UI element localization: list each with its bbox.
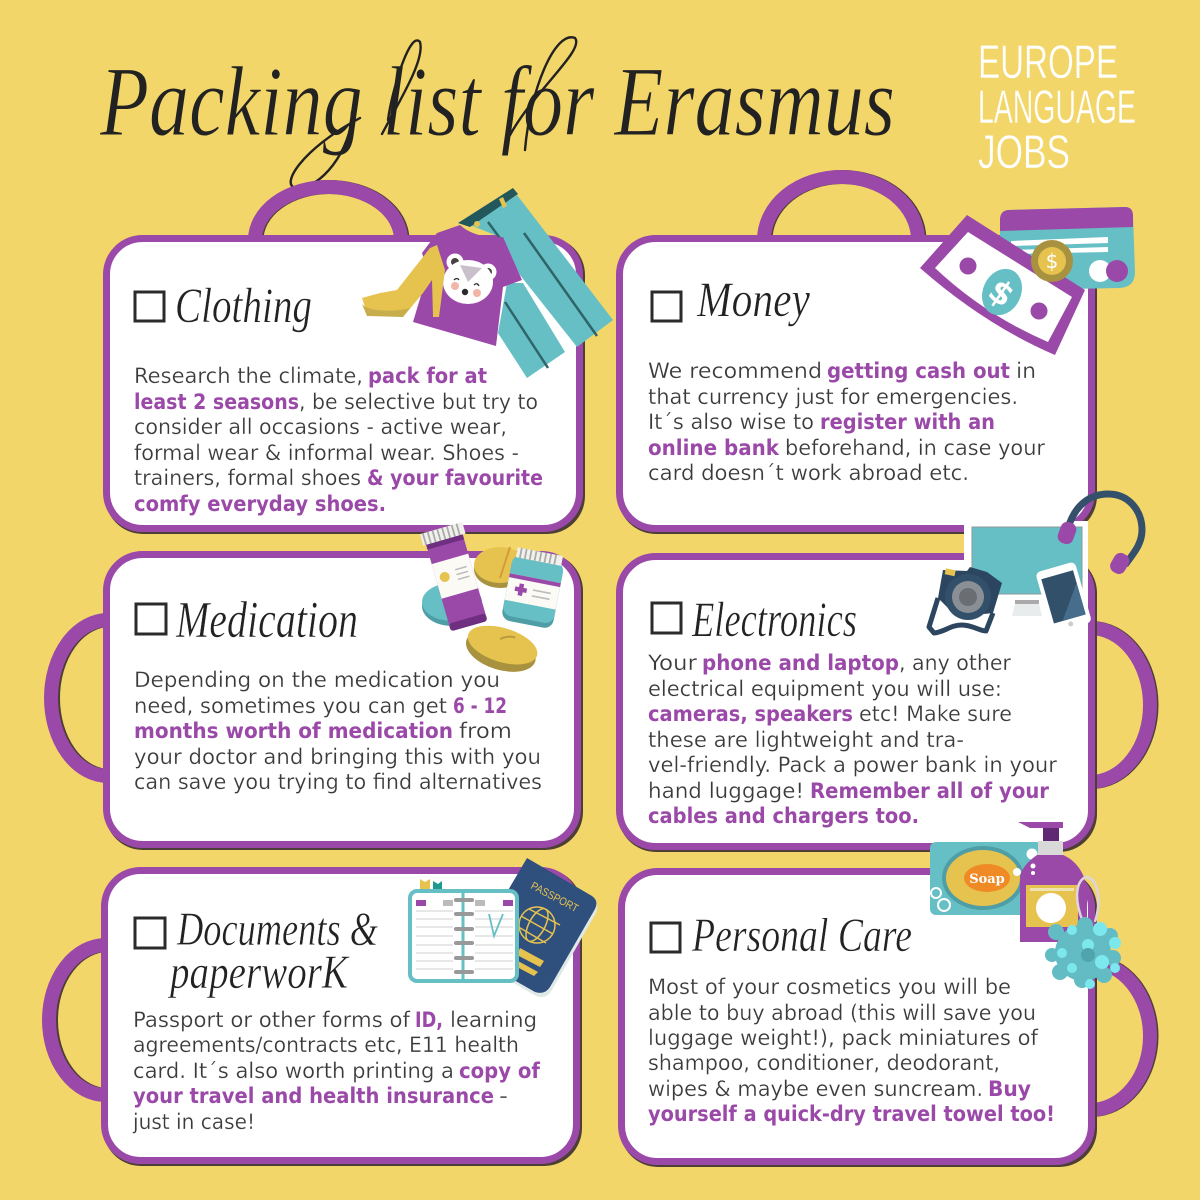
text block: copy of: [459, 1059, 541, 1083]
text block: register with an: [820, 410, 995, 434]
text block: agreements/contracts etc, E11 health: [133, 1033, 519, 1058]
text block: Depending on the medication you: [134, 668, 500, 693]
icon: soap, bottle and sponge: [930, 822, 1121, 989]
text block: luggage weight!), pack miniatures of: [648, 1026, 1038, 1051]
t-shirt: [413, 225, 522, 346]
card: [104, 870, 576, 1160]
text block: getting cash out: [827, 359, 1010, 383]
teal bottle: [501, 547, 566, 629]
text block: these are lightweight and tra-: [648, 728, 964, 753]
panel: documents: [49, 858, 597, 1166]
soap dish: Soap: [969, 872, 1005, 887]
purple bottle: [420, 522, 490, 632]
bag handle: [1090, 628, 1150, 782]
coin: [1031, 240, 1073, 282]
text block: cables and chargers too.: [648, 804, 919, 828]
monitor: [972, 527, 1082, 616]
pump bottle: [1018, 822, 1087, 942]
text block: shampoo, conditioner, deodorant,: [648, 1051, 1000, 1076]
text block: [134, 668, 542, 795]
heading: [168, 903, 378, 999]
text block: vel-friendly. Pack a power bank in your: [648, 753, 1057, 778]
bag handle: [49, 945, 106, 1095]
passport: PASSPORT: [529, 880, 580, 915]
text block: , any other: [899, 651, 1011, 676]
text block: Buy: [988, 1077, 1031, 1101]
text block: Research the climate,: [134, 364, 363, 389]
text block: learning: [450, 1008, 537, 1033]
text block: least 2 seasons: [134, 390, 299, 414]
large pill: [461, 618, 542, 680]
text block: Passport or other forms of: [133, 1008, 410, 1033]
icon: passport and notebook: [410, 858, 597, 997]
coin: $: [1046, 249, 1058, 273]
text block: online bank: [648, 436, 780, 460]
checkbox: [135, 918, 165, 948]
text block: card. It´s also worth printing a: [133, 1059, 454, 1084]
title: [99, 37, 895, 188]
bag handle: [764, 177, 918, 240]
text block: electrical equipment you will use:: [648, 677, 1002, 702]
text block: cameras, speakers: [648, 702, 853, 726]
text block: -: [499, 1084, 508, 1109]
jeans: [458, 188, 613, 378]
icon: credit card and banknote: [920, 207, 1135, 355]
text block: your doctor and bringing this with you: [134, 745, 541, 770]
text block: need, sometimes you can get: [134, 694, 447, 719]
credit card: [1000, 207, 1135, 290]
card: [622, 872, 1092, 1162]
text block: pack for at: [368, 364, 487, 388]
text block: wipes & maybe even suncream.: [648, 1077, 983, 1102]
panel: money: [618, 177, 1135, 534]
checkbox: [652, 292, 681, 321]
camera: [929, 567, 1002, 633]
headphones: [1056, 494, 1142, 577]
icon: devices: [929, 494, 1142, 640]
high heel shoe: [362, 245, 445, 317]
text block: comfy everyday shoes.: [134, 492, 386, 516]
checkbox: [651, 923, 680, 952]
yellow pill: [474, 547, 526, 588]
panel: personal care: [620, 822, 1152, 1167]
checkbox: [136, 604, 166, 634]
text block: hand luggage!: [648, 779, 804, 804]
logo: JOBS: [978, 125, 1070, 178]
panel: medication: [51, 522, 583, 850]
card: [106, 554, 578, 844]
card: [620, 238, 1092, 528]
panel: clothing: [105, 187, 613, 534]
text block: [648, 359, 1045, 486]
notebook: [410, 881, 517, 981]
text block: beforehand, in case your: [785, 436, 1045, 461]
text block: phone and laptop: [702, 651, 899, 675]
heading: Electronics: [691, 591, 857, 647]
text block: Most of your cosmetics you will be: [648, 975, 1011, 1000]
heading: Clothing: [175, 277, 312, 333]
bear face: [443, 254, 496, 304]
text block: , be selective but try to: [299, 390, 538, 415]
sponge: [1045, 877, 1121, 989]
teal pill: [422, 583, 482, 626]
title: Packing list for Erasmus: [99, 46, 895, 157]
passport: [470, 858, 597, 997]
text block: etc! Make sure: [859, 702, 1012, 727]
card: [620, 556, 1092, 846]
heading: Documents &: [176, 903, 378, 956]
text block: 6 - 12: [453, 694, 507, 718]
text block: in: [1016, 359, 1036, 384]
logo: EUROPE: [978, 35, 1118, 88]
text block: [132, 1008, 541, 1135]
text block: trainers, formal shoes: [134, 466, 361, 491]
text block: able to buy abroad (this will save you: [648, 1001, 1036, 1026]
text block: consider all occasions - active wear,: [134, 415, 507, 440]
phone: [1035, 561, 1092, 633]
text block: Your: [647, 651, 697, 676]
bag handle: [1090, 962, 1150, 1110]
heading: Money: [696, 271, 811, 327]
icon: clothes: [362, 188, 613, 378]
text block: yourself a quick-dry travel towel too!: [648, 1102, 1055, 1126]
text block: [647, 651, 1057, 828]
bag handle: [51, 620, 108, 776]
text block: It´s also wise to: [648, 410, 814, 435]
bag handle: [255, 187, 401, 240]
text block: ID,: [415, 1008, 443, 1032]
text block: card doesn´t work abroad etc.: [648, 461, 969, 486]
text block: We recommend: [648, 359, 822, 384]
bookmark: [420, 879, 430, 892]
logo: [978, 35, 1136, 178]
white backing: [964, 521, 1088, 640]
checkbox: [652, 603, 681, 633]
soap dish: [930, 842, 1042, 915]
text block: & your favourite: [367, 466, 543, 490]
text block: months worth of medication: [134, 719, 453, 743]
text block: Remember all of your: [810, 779, 1050, 803]
heading: Personal Care: [691, 909, 912, 962]
banknote: $: [981, 271, 1021, 315]
checkbox: [135, 292, 164, 321]
heading: paperworK: [168, 946, 350, 999]
text block: from: [459, 719, 512, 744]
text block: [648, 975, 1055, 1126]
text block: just in case!: [132, 1110, 255, 1135]
text block: that currency just for emergencies.: [648, 385, 1018, 410]
icon: medicine: [420, 522, 566, 680]
text block: your travel and health insurance: [133, 1084, 494, 1108]
banknote: [920, 215, 1085, 355]
card: [106, 238, 580, 528]
text block: can save you trying to find alternatives: [134, 770, 542, 795]
text block: [134, 364, 543, 516]
text block: formal wear & informal wear. Shoes -: [134, 441, 519, 466]
heading: Medication: [175, 592, 358, 649]
panel: electronics: [618, 494, 1152, 852]
